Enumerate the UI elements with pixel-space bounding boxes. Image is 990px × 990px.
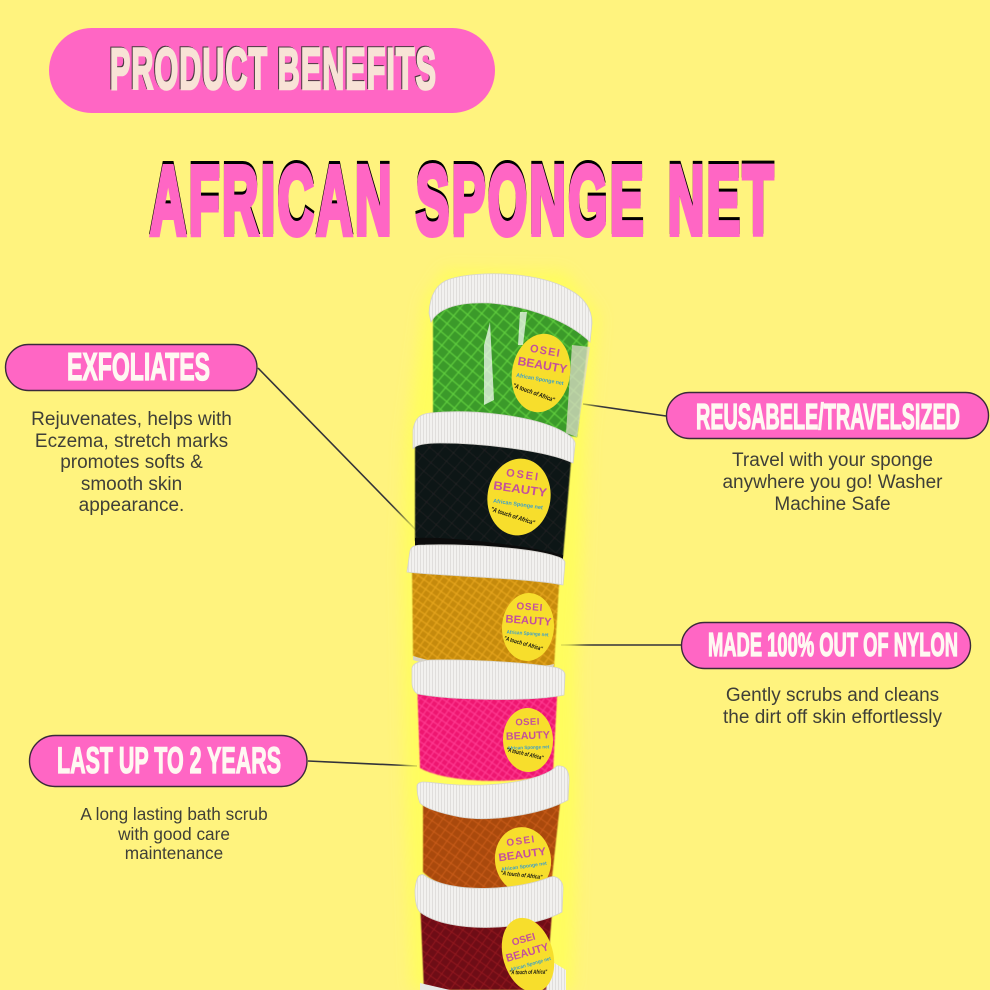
label <box>500 591 556 663</box>
label: African Sponge net <box>493 498 543 511</box>
label: OSEI <box>506 834 535 849</box>
panel: made of nylon <box>682 622 970 728</box>
description: anywhere you go! Washer <box>722 472 943 493</box>
label <box>493 912 563 990</box>
description: smooth skin <box>81 474 182 495</box>
description: with good care <box>117 824 230 844</box>
pill <box>6 344 257 390</box>
description: A long lasting bath scrub <box>80 804 268 824</box>
label <box>482 454 556 540</box>
description: promotes softs & <box>60 452 203 473</box>
header pill: product benefits: PRODUCT BENEFITS <box>110 37 437 102</box>
label: OSEI <box>505 467 539 483</box>
header pill: product benefits <box>49 28 495 113</box>
label: OSEI <box>515 717 540 728</box>
description: maintenance <box>125 843 223 863</box>
label: BEAUTY <box>506 729 550 743</box>
label: African Sponge net <box>516 373 564 387</box>
pill <box>30 736 307 786</box>
description: appearance. <box>79 495 184 516</box>
label: "A touch of Africa" <box>505 747 544 762</box>
jar: green <box>429 274 592 437</box>
label: "A touch of Africa" <box>509 970 547 976</box>
jar: black <box>413 412 575 562</box>
label: African Sponge net <box>506 630 549 638</box>
pill: EXFOLIATES <box>67 346 210 389</box>
connector lines <box>258 368 681 766</box>
description: the dirt off skin effortlessly <box>723 707 942 728</box>
pill <box>682 622 970 668</box>
label: BEAUTY <box>517 354 568 376</box>
panel: reusable / travel sized <box>666 392 988 515</box>
jar: rust <box>417 766 569 897</box>
label <box>506 329 576 417</box>
jar: dark red <box>415 875 566 990</box>
panel: exfoliates <box>6 344 257 516</box>
label: OSEI <box>511 931 537 949</box>
label: "A touch of Africa" <box>500 871 543 881</box>
label: African Sponge net <box>507 744 550 752</box>
description: Gently scrubs and cleans <box>726 685 939 706</box>
label: "A touch of Africa" <box>512 382 556 404</box>
label: BEAUTY <box>492 478 548 500</box>
product photo: stack of sponge jars <box>402 270 598 990</box>
label: African Sponge net <box>501 861 547 873</box>
label: "A touch of Africa" <box>503 636 543 653</box>
label <box>491 823 555 897</box>
panel: lasts up to 2 years <box>30 736 307 863</box>
pill: LAST UP TO 2 YEARS <box>57 740 281 781</box>
label: African Sponge net <box>510 956 552 973</box>
jar: orange <box>407 545 565 671</box>
label: OSEI <box>516 601 543 614</box>
label: BEAUTY <box>498 846 548 864</box>
description: Rejuvenates, helps with <box>31 409 232 430</box>
jar: pink <box>412 660 565 781</box>
description: Eczema, stretch marks <box>35 431 228 452</box>
label: "A touch of Africa" <box>490 506 536 527</box>
description: Travel with your sponge <box>732 450 933 471</box>
label: BEAUTY <box>505 613 552 629</box>
label: BEAUTY <box>505 941 551 965</box>
label <box>502 707 554 773</box>
description: Machine Safe <box>774 494 891 515</box>
label: OSEI <box>529 343 561 360</box>
